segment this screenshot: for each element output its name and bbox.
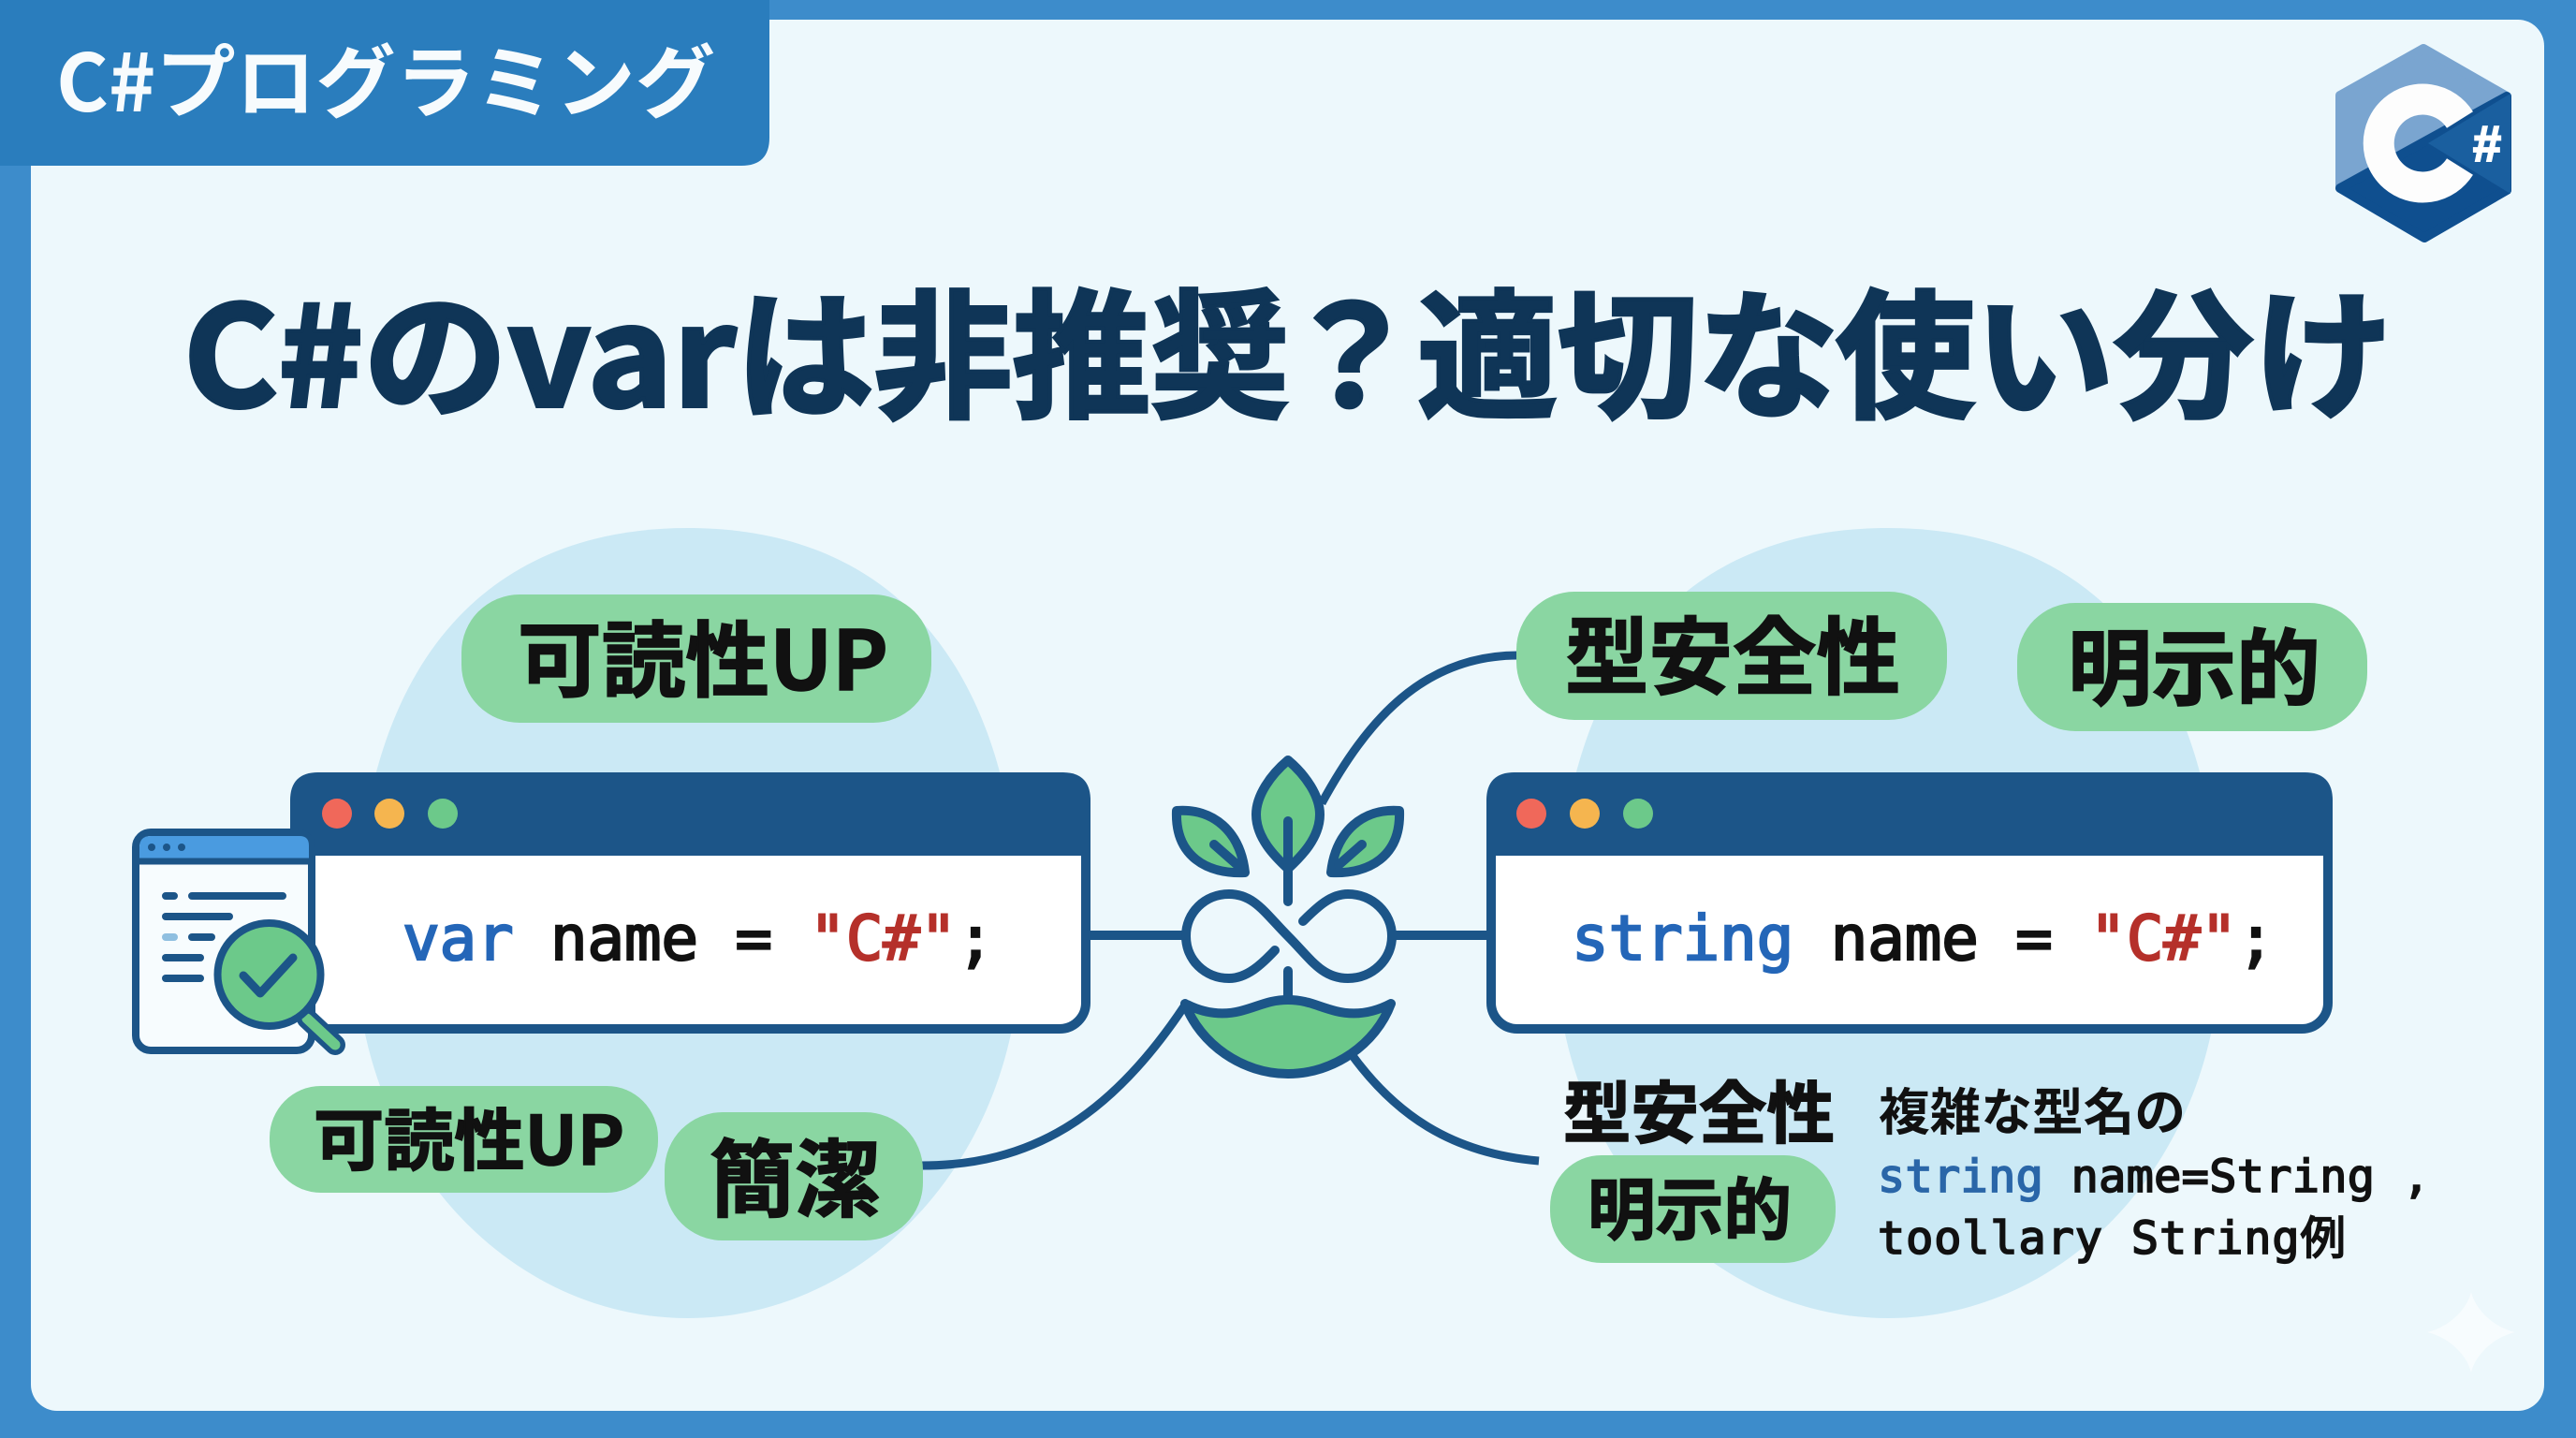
label: type safety lower: 型安全性 [1563, 1059, 1835, 1157]
magnifier lens [217, 923, 320, 1026]
icon: sparkle [2427, 1292, 2515, 1372]
lower stem [1283, 971, 1293, 1000]
pill: readability top: 可読性UP [518, 595, 888, 714]
right leaf [1331, 811, 1399, 873]
title: C#のvar [183, 245, 736, 447]
pill: readability bottom: 可読性UP [314, 1086, 624, 1184]
center stem [1283, 821, 1293, 902]
title: ？ [1281, 245, 1420, 447]
document header [139, 836, 309, 858]
center leaf [1256, 760, 1320, 869]
code window: string: string name = "C#"; [1572, 902, 2275, 975]
document text lines [166, 896, 283, 978]
pill: explicit lower [1550, 1155, 1836, 1263]
code window: string [1486, 772, 2333, 1029]
magnifier handle [307, 1019, 335, 1045]
pill: explicit top [2017, 602, 2367, 731]
pill: concise: 簡潔 [710, 1112, 880, 1234]
connector: infinity to right window [1393, 931, 1490, 940]
header tab [0, 0, 769, 166]
title: 使い分け [1836, 245, 2393, 447]
connector: bowl to lower text [1351, 1053, 1539, 1161]
icon: C# hexagon logo [2340, 49, 2510, 238]
background circle: right [1556, 528, 2220, 1318]
pill: type safety top: 型安全性 [1565, 590, 1900, 712]
document body [136, 832, 312, 1050]
icon: C# hexagon logo: # [2473, 116, 2501, 172]
connector: concise pill to bowl [921, 1006, 1184, 1166]
infinity symbol [1186, 894, 1392, 978]
title: 適切な [1417, 245, 1838, 447]
check mark [243, 958, 293, 993]
pill: concise [665, 1112, 923, 1240]
header tab: C#プログラミング [56, 20, 715, 135]
text block: complex type names note: 複雑な型名の [1879, 1071, 2186, 1145]
left leaf [1177, 811, 1245, 873]
connector: left window to infinity [1086, 931, 1183, 940]
text block: complex type names note: string name=String , [1878, 1151, 2430, 1203]
code window: var: var name = "C#"; [402, 902, 994, 975]
background circle: left [356, 528, 1020, 1318]
text block: complex type names note: toollary String例 [1878, 1212, 2346, 1265]
connector: upper leaf to type-safety pill [1322, 655, 1518, 803]
title: は非推奨 [736, 245, 1289, 447]
icon: document with magnifier [136, 832, 335, 1050]
title [183, 245, 2393, 447]
pill: explicit top: 明示的 [2068, 602, 2320, 723]
code window: var [290, 772, 1090, 1029]
bowl leaf [1185, 1000, 1391, 1074]
icon: sprout and infinity [1177, 760, 1399, 1074]
pill: explicit lower: 明示的 [1588, 1155, 1792, 1254]
text block: complex type names note [1878, 1071, 2430, 1265]
